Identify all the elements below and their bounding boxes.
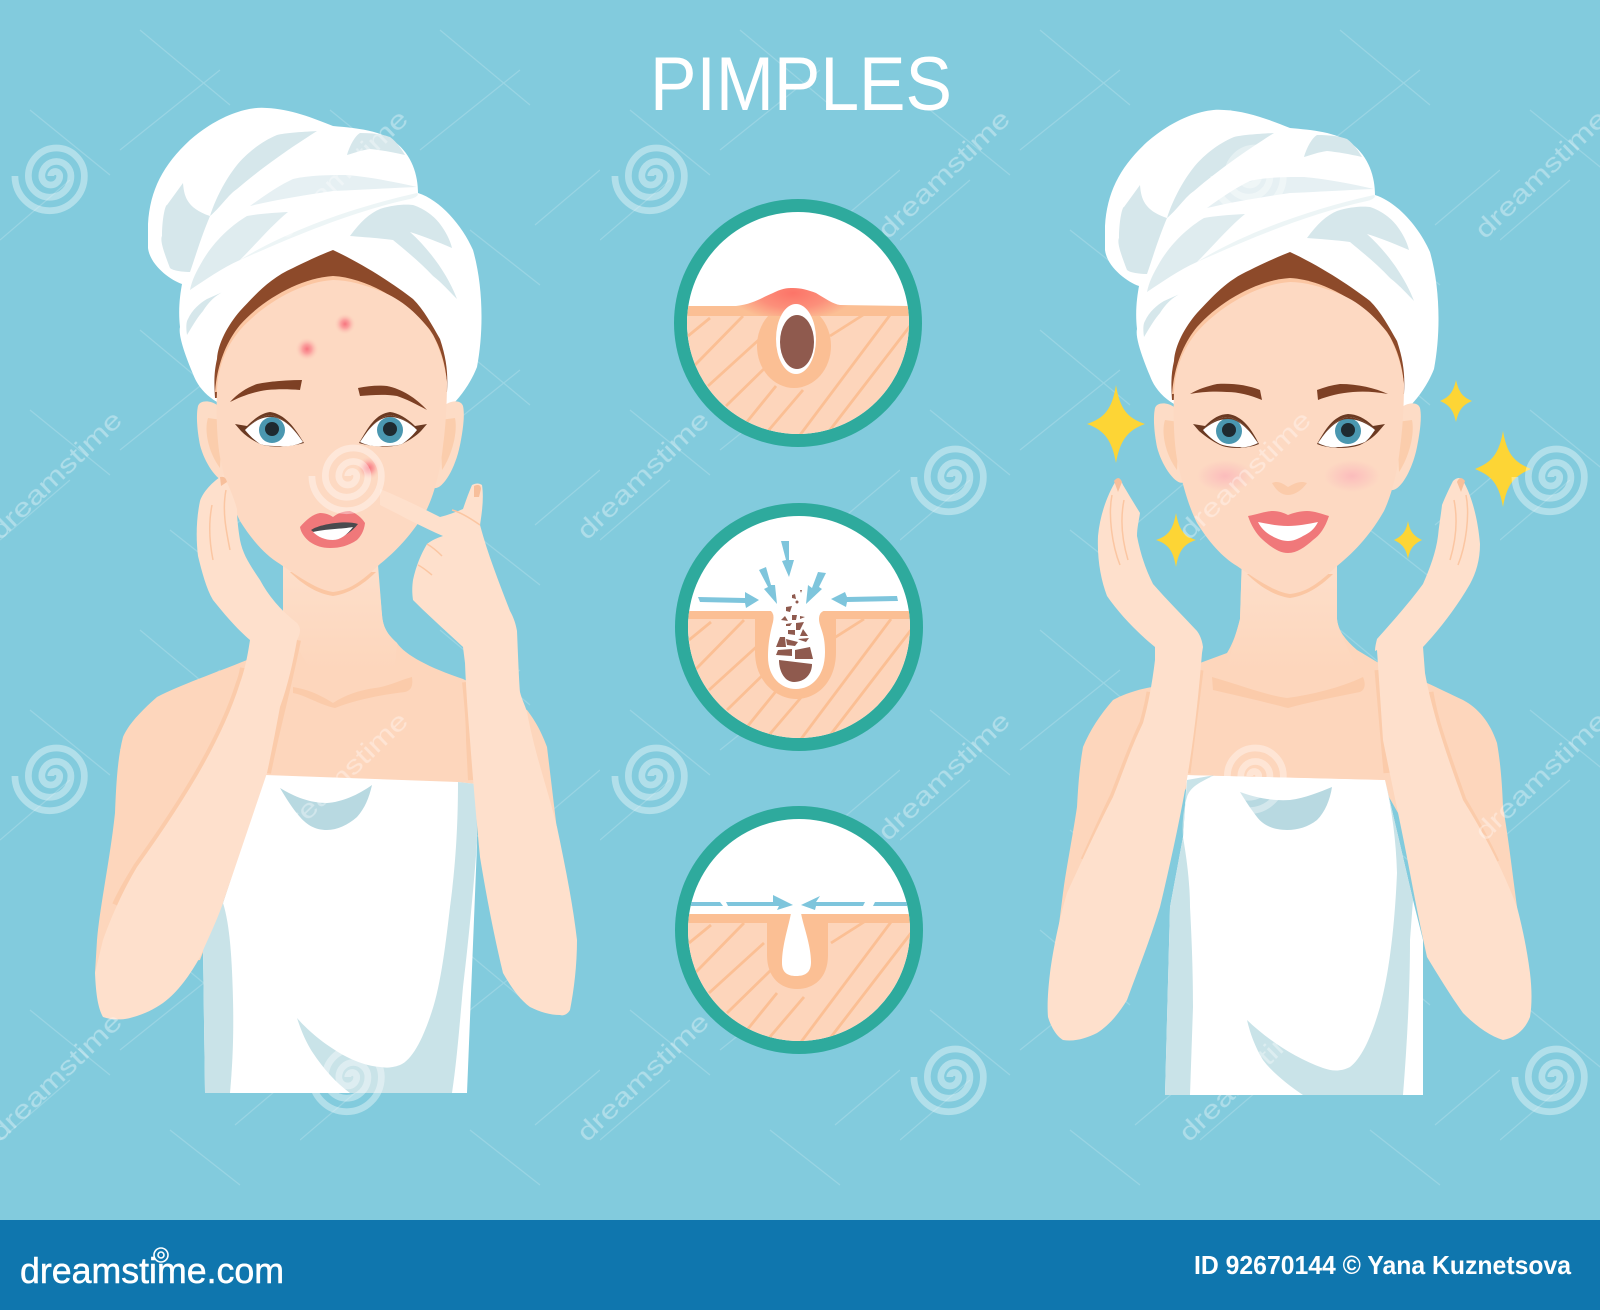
circle 3: pore closing [675,806,923,1054]
cross section [686,211,910,436]
torso and upper arms [95,560,557,973]
watermark text: dreamstime [1172,1006,1317,1147]
watermark text: dreamstime [1172,404,1317,545]
sparkle 3 [1440,380,1472,422]
right eye [1317,414,1385,448]
footer logo spiral [154,1248,168,1262]
towel left shade [1165,775,1215,1095]
figure: woman with clear skin [1048,110,1532,1095]
torso and upper arms [1057,560,1517,940]
watermark text: dreamstime [269,103,414,244]
right eye [359,412,427,447]
pimples [295,313,381,480]
towel upper fold [280,785,372,830]
cross section [687,515,911,739]
sparkle 4 [1475,431,1531,507]
footer band [0,1220,1600,1310]
footer logo: dreamstime.com [20,1250,284,1291]
pointing hand lines [418,510,480,575]
debris [776,590,813,682]
cheek blush [1197,460,1380,492]
neck [283,555,397,670]
eyebrows [1190,384,1388,400]
left eye [235,412,304,447]
left hand and forearm [95,475,300,1019]
ring [674,199,922,447]
chest shadows beside arms [267,640,472,780]
left raised hand and forearm [1048,479,1203,1041]
left eye [1193,414,1259,448]
watermark text: dreamstime [1468,705,1600,846]
bath towel [203,775,477,1093]
left hand finger lines [1110,495,1128,565]
ring [675,503,923,751]
circle 2: pimple being squeezed [675,503,923,751]
collarbone [293,677,412,708]
neck [1227,555,1357,670]
sparkle 1 [1087,385,1145,463]
left forearm shadow [116,668,244,905]
pressure arrows [698,541,898,608]
sparkle 2 [1156,513,1196,567]
watermark text: dreamstime [570,404,715,545]
right raised hand and forearm [1375,478,1532,1040]
watermark text: dreamstime [269,705,414,846]
towel right shade [297,782,477,1093]
image credit: ID 92670144 © Yana Kuznetsova [1194,1250,1572,1280]
right hand finger lines [1450,495,1468,565]
forearm shadows [1084,692,1496,862]
eyebrows [230,380,427,410]
bath towel [1165,775,1423,1095]
left hand finger lines [210,490,230,560]
smiling mouth [1248,511,1329,553]
open mouth [300,511,365,548]
chest shadows beside arms [1187,670,1387,773]
cross section [687,818,911,1043]
nose [1272,482,1307,495]
closing arrows [687,895,911,910]
towel left shade [203,903,233,1093]
watermark spirals [15,148,1584,1112]
towel right shade [1247,780,1413,1095]
watermark text: dreamstime [570,1006,715,1147]
head with towel turban [1105,110,1439,598]
sparkle 5 [1394,521,1422,559]
pointing hand and forearm [380,484,577,1015]
towel upper fold [1240,787,1332,830]
ring [675,806,923,1054]
watermark text: dreamstime [871,103,1016,244]
chest [1188,662,1392,780]
watermark text: dreamstime [871,705,1016,846]
circle 1: inflamed pimple [674,199,922,447]
watermark text: dreamstime [1468,103,1600,244]
figure: woman with pimples [95,108,577,1093]
watermark text [0,103,1600,1147]
fingernails [1114,478,1465,492]
head with towel turban [148,108,482,596]
collarbone [1212,677,1365,708]
fingernails [220,477,481,497]
title: PIMPLES [650,42,952,127]
